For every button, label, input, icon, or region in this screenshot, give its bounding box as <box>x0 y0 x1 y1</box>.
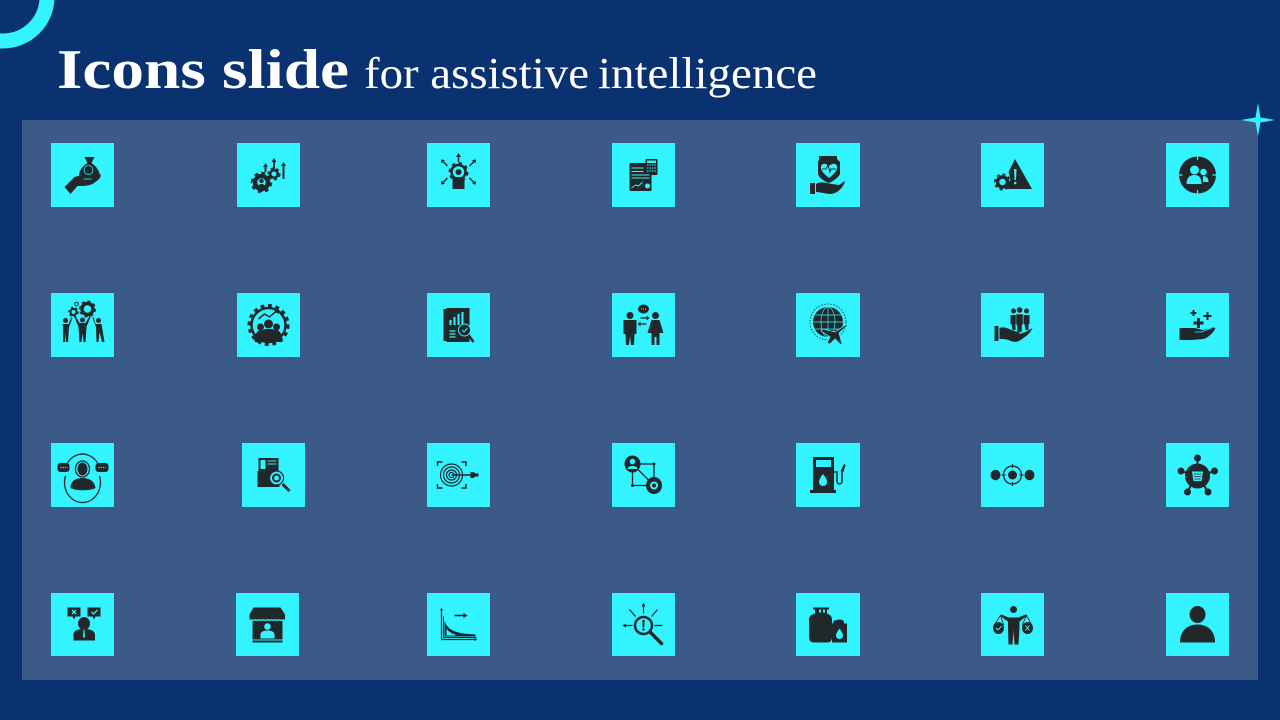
icon: man and woman communicating <box>612 293 675 357</box>
icon: hand holding money bag <box>51 143 114 207</box>
icon: globe with airplane <box>796 293 860 357</box>
icon: hand holding group of people <box>981 293 1044 357</box>
icon: person and gear network <box>612 443 675 507</box>
decorative sparkle star <box>1241 103 1275 136</box>
title: Icons slide <box>57 39 349 101</box>
icon: team inside gear with growth arrow <box>237 293 300 357</box>
icon grid <box>51 143 1229 656</box>
title: for assistive <box>364 49 589 98</box>
icon: gear person with radial arrows <box>427 143 490 207</box>
icon: folder search with gear <box>242 443 305 507</box>
icon: fuel pump <box>796 443 860 507</box>
icon: person deciding yes or no <box>51 593 114 656</box>
icon: magnifier with alert and rays <box>612 593 675 656</box>
icon: network around central document <box>1166 443 1229 507</box>
icon: team raising gears <box>51 293 114 357</box>
icon: warning triangle with gear <box>981 143 1044 207</box>
icon: shop with vendor <box>236 593 299 656</box>
icon: hand with sparkles <box>1166 293 1229 357</box>
panel: icon background <box>22 120 1258 680</box>
icon: three connected dots <box>981 443 1044 507</box>
icon: gas cylinder and fuel can <box>796 593 860 656</box>
icon: target with dart <box>427 443 490 507</box>
icon: financial document with calculator <box>612 143 675 207</box>
decorative ring top left <box>0 0 47 41</box>
icon: support agent with speech bubbles <box>51 443 114 507</box>
icon: people in target circle <box>1166 143 1229 207</box>
icon: hand holding health shield <box>796 143 860 207</box>
title: intelligence <box>598 49 817 98</box>
icon: gears with rising arrows <box>237 143 300 207</box>
icon: user silhouette <box>1166 593 1229 656</box>
icon: report under magnifier <box>427 293 490 357</box>
title <box>57 39 817 101</box>
icon: declining curve chart <box>427 593 490 656</box>
icon: man balancing scales <box>981 593 1044 656</box>
